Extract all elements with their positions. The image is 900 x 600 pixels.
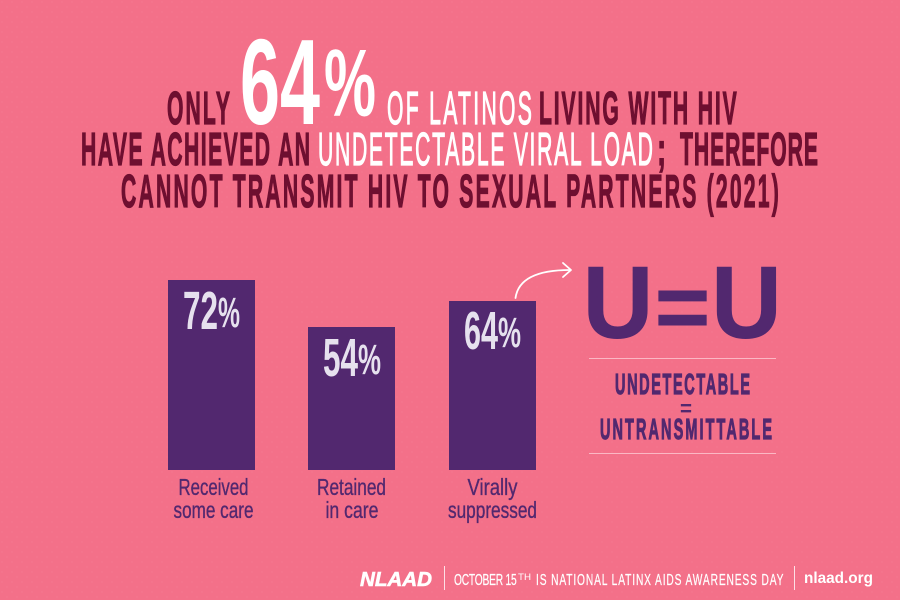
U=U heading: U — [712, 246, 782, 360]
U=U heading: U — [583, 246, 653, 360]
title line 1: LIVING WITH HIV — [539, 83, 737, 134]
U=U heading: = — [655, 258, 710, 358]
bar: retained in care — [308, 327, 395, 523]
bar: received some care: 72 — [183, 281, 218, 341]
bar: virally suppressed: 64 — [464, 301, 498, 361]
bar: received some care: Received — [178, 474, 248, 500]
bar: received some care: % — [218, 289, 240, 337]
title line 2: UNDETECTABLE VIRAL LOAD — [318, 124, 653, 175]
awareness day text: TH — [518, 572, 531, 582]
title line 1: ONLY — [167, 83, 230, 134]
title line 3: CANNOT TRANSMIT HIV TO SEXUAL PARTNERS (2021) — [121, 166, 779, 217]
U=U heading — [583, 246, 782, 360]
title line 1 — [167, 14, 737, 150]
footer — [360, 566, 873, 591]
U=U panel — [583, 246, 782, 454]
big 64 percent: % — [324, 30, 376, 137]
awareness day text: IS NATIONAL LATINX AIDS AWARENESS DAY — [536, 571, 784, 589]
bar: virally suppressed: suppressed — [448, 497, 537, 523]
definition text: UNDETECTABLE — [615, 367, 750, 400]
bar: retained in care: % — [358, 336, 381, 384]
bar: virally suppressed — [448, 301, 537, 523]
divider top — [589, 358, 776, 359]
title line 2 — [81, 124, 818, 176]
bar: retained in care: 54 — [323, 328, 358, 388]
awareness day text: OCTOBER 15 — [454, 571, 517, 589]
bar: retained in care: Retained — [317, 474, 386, 500]
footer separator — [444, 566, 445, 590]
divider bottom — [589, 453, 776, 454]
bar: virally suppressed: Virally — [468, 474, 518, 500]
bar: virally suppressed: % — [498, 309, 521, 357]
bar: received some care — [168, 280, 255, 523]
big 64 percent: 64 — [240, 14, 320, 150]
title — [81, 14, 818, 217]
title line 1: OF LATINOS — [387, 83, 532, 134]
definition text: UNTRANSMITTABLE — [600, 412, 772, 445]
bar chart — [168, 280, 537, 523]
title line 2: ; — [657, 125, 666, 176]
footer separator — [794, 566, 795, 590]
NLAAD logo: NLAAD — [360, 569, 432, 591]
title line 2: THEREFORE — [680, 124, 818, 175]
title line 2: HAVE ACHIEVED AN — [81, 124, 310, 175]
definition text — [600, 367, 772, 445]
bar: received some care: some care — [174, 497, 254, 523]
bar: retained in care: in care — [326, 497, 378, 523]
definition text: = — [680, 396, 692, 421]
arrow: from bar to U=U — [516, 263, 571, 298]
website: nlaad.org — [804, 570, 873, 587]
